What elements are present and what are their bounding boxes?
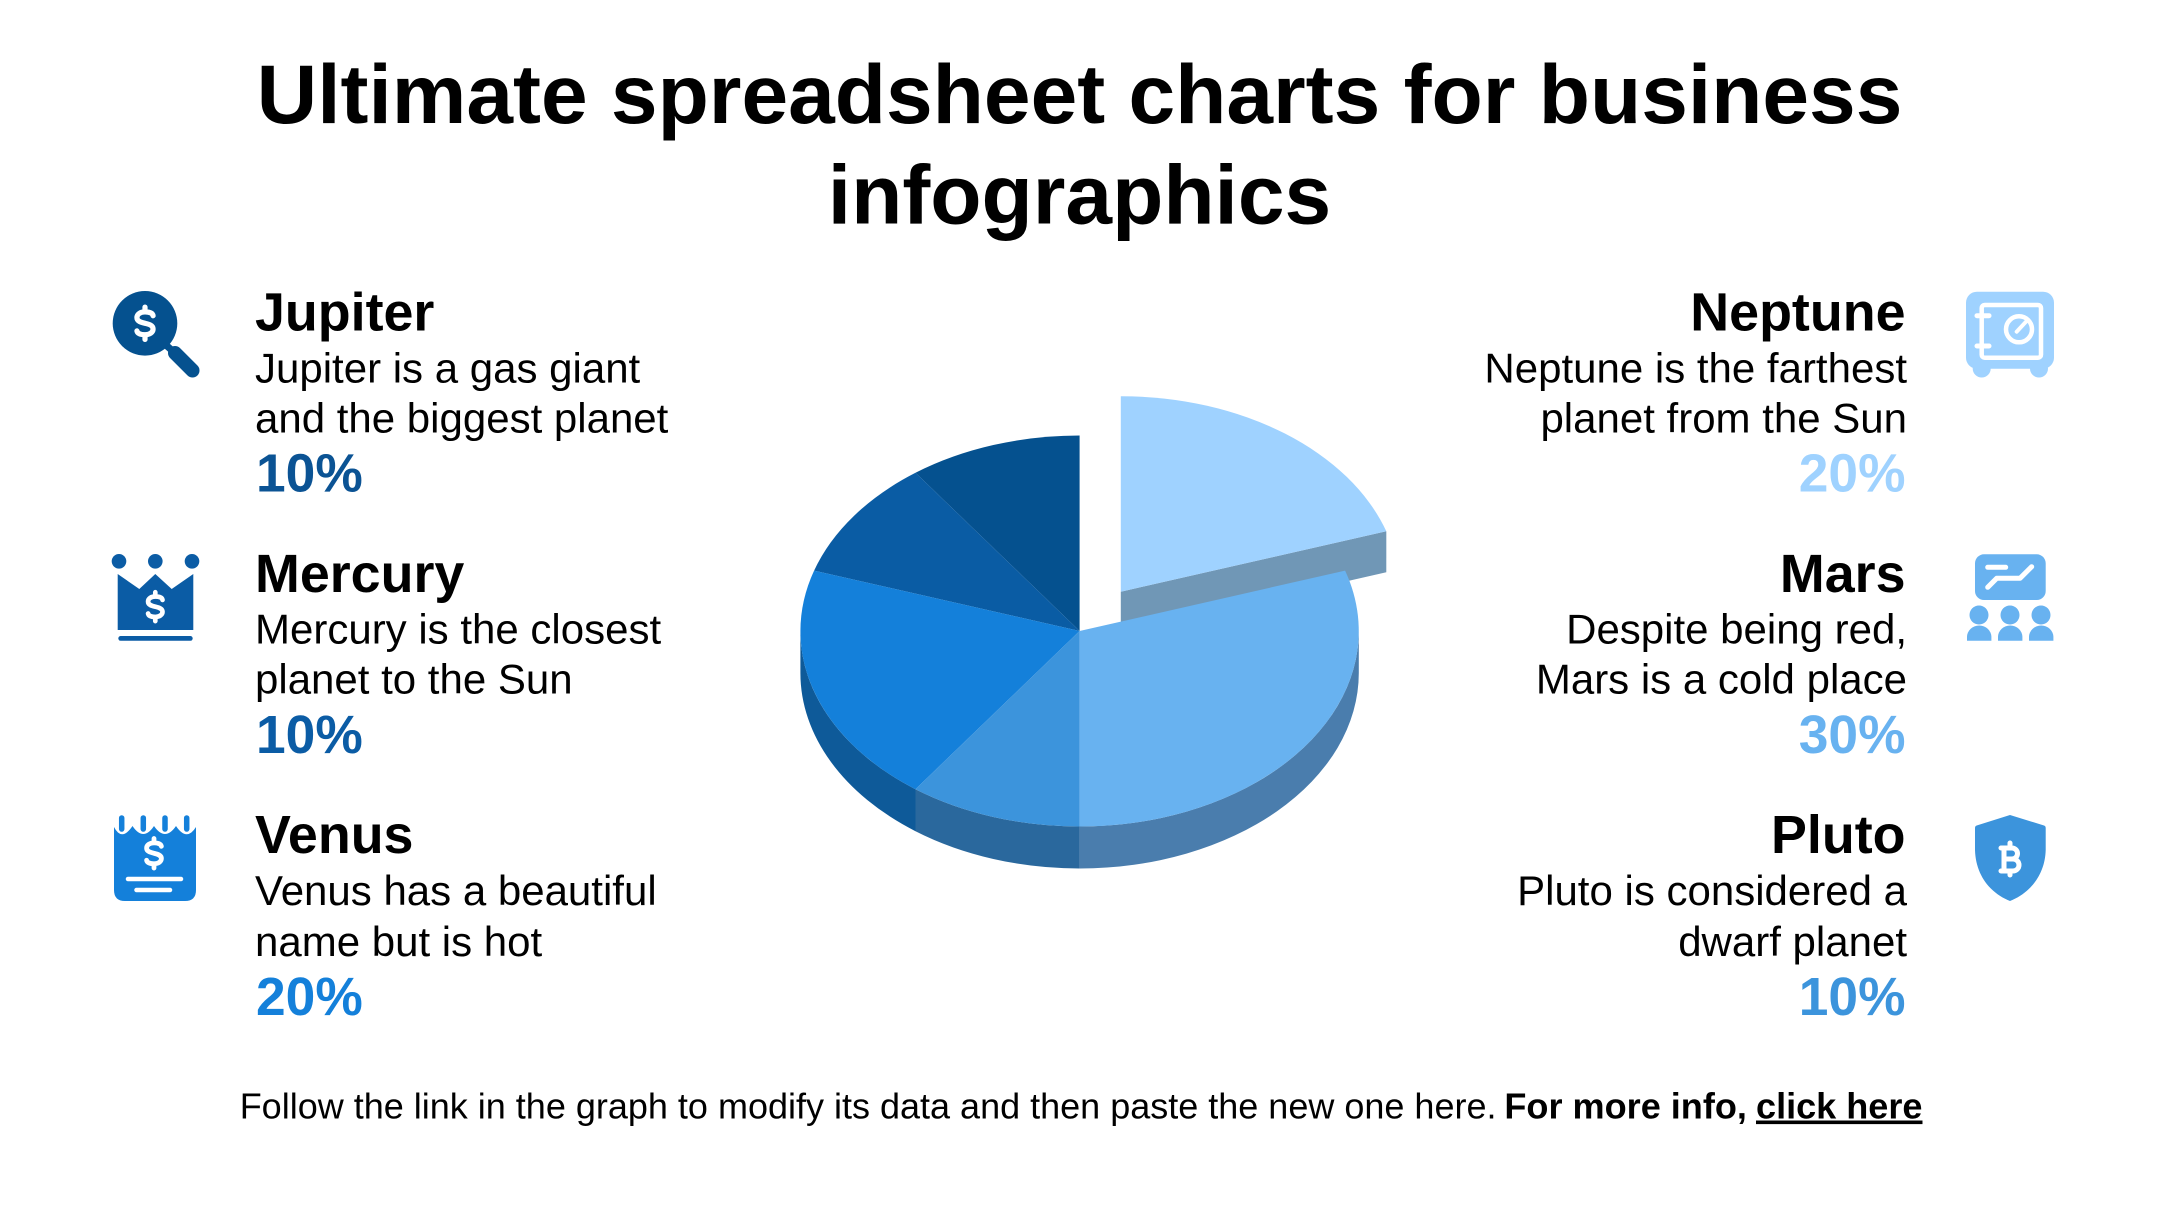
icon: crown with dollar: [112, 554, 199, 641]
footer note: For more info,: [1504, 1086, 1747, 1126]
value: Neptune 20%: 20%: [1799, 445, 1906, 504]
text: Mercury description: planet to the Sun: [255, 656, 573, 703]
value: Mars 30%: 30%: [1799, 706, 1906, 765]
side walls: [800, 631, 1359, 868]
value: Mercury 10%: 10%: [256, 706, 363, 765]
value: Jupiter 10%: 10%: [256, 445, 363, 504]
heading: Jupiter: Jupiter: [255, 283, 434, 343]
text: Mars description: Despite being red,: [1566, 606, 1907, 652]
text: Venus description: name but is hot: [255, 918, 543, 965]
slice: Neptune 20% exploded: [1121, 396, 1386, 633]
text: Neptune description: [1484, 345, 1907, 442]
heading: Neptune: Neptune: [1690, 283, 1906, 343]
panel: Jupiter: [113, 283, 669, 504]
value: Venus 20%: 20%: [256, 968, 363, 1027]
text: Jupiter description: and the biggest planet: [255, 395, 669, 442]
text: Mars description: [1536, 606, 1907, 703]
title: Ultimate spreadsheet charts for business: [257, 47, 1902, 141]
text: Mars description: Mars is a cold place: [1536, 656, 1907, 703]
text: Jupiter description: Jupiter is a gas giant: [255, 345, 641, 392]
slice: Jupiter 10%: [916, 436, 1080, 631]
chart: 3D exploded pie: [800, 396, 1386, 868]
text: Pluto description: Pluto is considered a: [1517, 867, 1908, 914]
heading: Pluto: Pluto: [1771, 805, 1906, 865]
text: Pluto description: [1517, 867, 1908, 965]
text: Neptune description: planet from the Sun: [1540, 395, 1907, 442]
icon: bitcoin shield: [1975, 815, 2046, 901]
slice: Pluto 10%: [916, 631, 1080, 826]
slice: Venus 20%: [800, 571, 1080, 789]
text: Jupiter description: [255, 345, 669, 442]
heading: Venus: Venus: [255, 805, 413, 865]
title: [257, 47, 1902, 241]
panel: Neptune: [1484, 283, 2054, 504]
value: Pluto 10%: 10%: [1799, 968, 1906, 1027]
panel: Mercury: [112, 544, 661, 765]
text: Neptune description: Neptune is the farthest: [1484, 345, 1907, 392]
icon: magnifier with dollar: [113, 291, 192, 370]
slice: Mars 30%: [1080, 571, 1359, 826]
slice: Mercury 10%: [814, 473, 1080, 631]
icon: safe: [1966, 292, 2054, 378]
footer note: Follow the link in the graph to modify its data and then paste the new one here.: [240, 1086, 1496, 1126]
heading: Mars: Mars: [1780, 544, 1906, 604]
panel: Mars: [1536, 544, 2053, 765]
text: Venus description: [255, 867, 657, 965]
panel: Venus: [114, 805, 657, 1027]
heading: Mercury: Mercury: [255, 544, 464, 604]
panel: Pluto: [1517, 805, 2046, 1027]
text: Mercury description: [255, 606, 661, 703]
text: Venus description: Venus has a beautiful: [255, 867, 657, 914]
icon: notepad with dollar: [114, 818, 196, 901]
footer note: click here: [1756, 1086, 1922, 1126]
text: Mercury description: Mercury is the closest: [255, 606, 661, 652]
text: Pluto description: dwarf planet: [1678, 918, 1907, 965]
title: infographics: [828, 147, 1331, 241]
icon: audience and screen: [1967, 554, 2053, 641]
